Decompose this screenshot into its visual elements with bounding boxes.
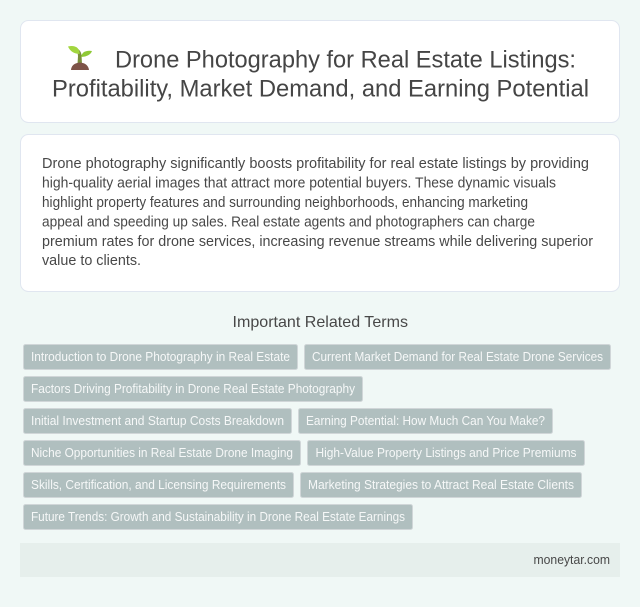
- summary text: appeal and speeding up sales. Real estate agents and photographers can charge: [42, 214, 535, 230]
- summary text: premium rates for drone services, increasing revenue streams while delivering superior: [42, 234, 593, 250]
- tag: Skills, Certification, and Licensing Requirements: [31, 478, 286, 492]
- title: [52, 46, 589, 102]
- panel: summary paragraph: [20, 134, 620, 292]
- tag: Current Market Demand for Real Estate Drone Services: [312, 350, 603, 364]
- tag: [24, 504, 412, 530]
- footer bar: [20, 543, 620, 577]
- summary text: value to clients.: [42, 253, 141, 269]
- tag: [24, 440, 300, 466]
- panel: related term tags: [24, 344, 610, 530]
- summary text: Drone photography significantly boosts profitability for real estate listings by providing: [42, 156, 589, 172]
- footer source: moneytar.com: [534, 552, 610, 567]
- tag: [24, 472, 294, 498]
- tag: [24, 408, 292, 434]
- tag: [24, 344, 298, 370]
- title: Drone Photography for Real Estate Listings:: [115, 46, 576, 74]
- tag: [304, 344, 610, 370]
- tag: Factors Driving Profitability in Drone Real Estate Photography: [31, 382, 356, 396]
- tag: Niche Opportunities in Real Estate Drone Imaging: [31, 446, 293, 460]
- tag: Introduction to Drone Photography in Real Estate: [31, 350, 290, 364]
- title: Profitability, Market Demand, and Earning Potential: [52, 76, 589, 102]
- tag: Earning Potential: How Much Can You Make?: [306, 414, 545, 428]
- tag: [308, 440, 584, 466]
- heading: related terms: Important Related Terms: [232, 314, 408, 331]
- summary text: high-quality aerial images that attract more potential buyers. These dynamic visuals: [42, 176, 556, 192]
- tag: [300, 472, 582, 498]
- summary text: [42, 156, 593, 269]
- tag: High-Value Property Listings and Price Premiums: [316, 446, 576, 460]
- panel: title card: [20, 20, 620, 122]
- tag: Future Trends: Growth and Sustainability in Drone Real Estate Earnings: [31, 510, 405, 524]
- icon: sprout: [68, 46, 92, 70]
- tag: Marketing Strategies to Attract Real Estate Clients: [308, 478, 574, 492]
- tag: Initial Investment and Startup Costs Breakdown: [31, 414, 284, 428]
- tag: [24, 376, 362, 402]
- summary text: highlight property features and surrounding neighborhoods, enhancing marketing: [42, 195, 528, 211]
- tag: [298, 408, 552, 434]
